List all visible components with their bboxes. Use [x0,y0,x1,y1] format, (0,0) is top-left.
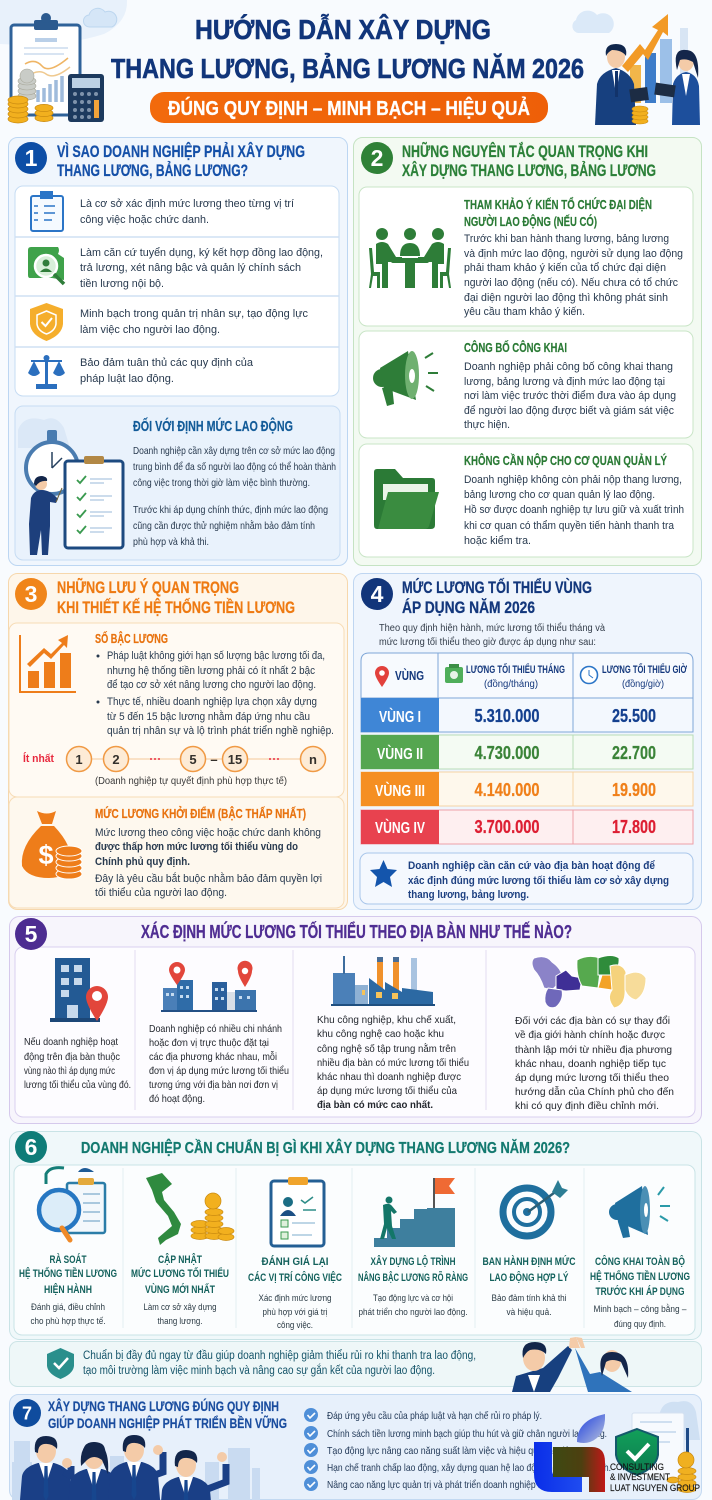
item 3 text: phù hợp với giá trị [262,1307,328,1318]
column 3 text: khu công nghệ cao hoặc khu [317,1028,444,1040]
column 3 text: áp dụng mức lương tối thiểu của [317,1085,457,1097]
item 1 text: Đánh giá, điều chỉnh [31,1302,105,1313]
icon: megaphone [373,351,438,406]
icon: money bag: $ [38,840,54,870]
benefit 3 [304,1443,582,1457]
panel: section 4 minimum wage [354,574,702,910]
consult text: Trước khi ban hành thang lương, bảng lương [464,233,669,245]
section 7 heading [48,1397,287,1431]
row: region I: VÙNG I [379,707,421,726]
logo leaf [577,1414,605,1443]
labour norm text: Trước khi áp dụng chính thức, định mức lao động [133,504,328,516]
column 4 text: Đối với các địa bàn có sự thay đổi [515,1015,670,1027]
starting salary text: Mức lương theo công việc hoặc chức danh không [95,827,321,839]
reason 2 text: tiền lương nội bộ. [80,278,164,290]
item 5 title: BAN HÀNH ĐỊNH MỨC [482,1255,576,1268]
item 4 title: NÂNG BẬC LƯƠNG RÕ RÀNG [358,1271,468,1284]
item 5 title [482,1255,576,1284]
note text: xác định đúng mức lương tối thiểu làm cơ sở xây dựng [408,875,669,887]
item 6 text: Minh bạch – công bằng – [594,1304,687,1315]
item 5 text [492,1293,566,1318]
icon: folder [374,469,439,529]
illustration: high five [512,1337,632,1392]
icon: industrial zone [331,956,435,1006]
grades bullets: Thực tế, nhiều doanh nghiệp lựa chọn xây dựng [107,696,317,708]
reason 1 text [80,198,294,226]
item 2 text: Làm cơ sở xây dựng [144,1302,216,1313]
icon: megaphone [609,1186,670,1238]
grade scale: (Doanh nghiệp tự quyết định phù hợp thực tế) [95,775,287,787]
section 4 note [360,853,693,904]
icon: rising chart [20,635,76,692]
item 1 title: RÀ SOÁT [50,1253,87,1266]
row: region I: 25.500 [612,706,656,726]
column 1 [24,958,131,1091]
column 4 text [515,1015,674,1112]
section 2 heading [402,141,656,180]
section 3 number badge: 3 [25,581,37,607]
column 1 text: lương tối thiểu của vùng đó. [24,1079,131,1091]
column 2 text: hoặc đơn vị trực thuộc đặt tại [149,1037,269,1049]
icon: cloud left [83,8,117,27]
icon: magnifier and clipboard [39,1168,105,1240]
labour norm text: Doanh nghiệp cần xây dựng trên cơ sở mức lao động [133,445,335,457]
title: THANG LƯƠNG, BẢNG LƯƠNG NĂM 2026 [111,52,584,84]
logo shield [616,1429,658,1475]
labour norm text: phù hợp và khả thi. [133,536,209,548]
column 2 text [149,1023,289,1105]
reason 3 text: Minh bạch trong quản trị nhân sự, tạo động lực [80,308,308,320]
row: region IV: 3.700.000 [474,817,540,837]
grades bullets: Pháp luật không giới hạn số lượng bậc lương tối đa, [107,650,325,662]
section 4 intro: Theo quy định hiện hành, mức lương tối thiểu tháng và [379,622,605,634]
item 2 title [131,1253,229,1296]
illustration: business people and growth chart [572,11,700,125]
section 7 heading: XÂY DỰNG THANG LƯƠNG ĐÚNG QUY ĐỊNH [48,1397,279,1414]
column 1 text: Nếu doanh nghiệp hoạt [24,1036,118,1048]
column 1 text [24,1036,131,1091]
item 2 text: thang lương. [158,1316,202,1327]
section 5 number badge [15,918,47,950]
wage table [361,653,693,844]
item 6 title [590,1255,690,1298]
icon: money bag [22,811,82,879]
logo: Luat Nguyen Group [534,1414,700,1494]
panel: section 3 notes [8,574,348,910]
wage table: (đồng/tháng) [484,678,538,690]
section 5 number badge: 5 [25,921,38,947]
consult heading: THAM KHẢO Ý KIẾN TỔ CHỨC ĐẠI DIỆN [464,197,652,212]
starting salary heading: MỨC LƯƠNG KHỞI ĐIỂM (BẬC THẤP NHẤT) [95,806,306,821]
note text: Chuẩn bị đầy đủ ngay từ đầu giúp doanh nghiệp giảm thiểu rủi ro khi thanh tra lao động, [83,1350,476,1362]
consult text: người lao động (nếu có). Nếu chưa có tổ chức [464,277,678,289]
logo coins [667,1452,696,1492]
item 4 text: Tạo động lực và cơ hội [373,1293,453,1304]
grade scale: n [309,752,317,767]
reason 2 text: trả lương, xét nâng bậc và quản lý chính sách [80,262,301,274]
section 7 number badge: 7 [22,1404,32,1424]
row: region IV: VÙNG IV [375,818,425,837]
publish text: nơi làm việc trước thời điểm đưa vào áp dụng [464,390,676,402]
section 4 number badge: 4 [371,581,384,607]
card: number of grades [9,623,344,797]
benefit 5 [304,1477,577,1491]
benefit 2 [304,1426,607,1440]
labour norm text [133,445,336,548]
column 2 text: Doanh nghiệp có nhiều chi nhánh [149,1023,282,1035]
section 6 number badge [15,1131,47,1163]
item 2 title: VÙNG MỚI NHẤT [145,1283,215,1296]
reason 1 text: Là cơ sở xác định mức lương theo từng vị trí [80,198,294,210]
labour norm text: cũng cần được thử nghiệm nhằm bảo đảm tính [133,519,315,532]
logo text: & INVESTMENT [610,1472,670,1483]
panel: preparation note [10,1337,702,1392]
benefit 4 [304,1460,611,1474]
section 2 number badge: 2 [371,145,383,171]
icon: merged map pieces [532,956,646,1008]
illustration: cheering employees [19,1435,227,1500]
icon: stairs with flag [374,1178,455,1247]
row: region IV [361,810,693,844]
reason 4 text [80,357,254,385]
grade scale: 1 [75,752,83,767]
card: publish [359,331,693,438]
column 3 text: Khu công nghiệp, khu chế xuất, [317,1014,456,1026]
publish text: lương, bảng lương và định mức lao động tại [464,376,665,388]
reason 3 text: làm việc cho người lao động. [80,324,220,336]
no submission text: khi cơ quan có thẩm quyền tiến hành thanh tra [464,520,675,532]
item 1 title: HỆ THỐNG TIỀN LƯƠNG [19,1266,117,1280]
column 4 text: hướng dẫn của Chính phủ cho đến [515,1085,674,1098]
item 3 title: ĐÁNH GIÁ LẠI [262,1255,328,1268]
item 3 text: công việc. [277,1320,313,1331]
title [111,14,584,84]
column 2 text: đơn vị áp dụng mức lương tối thiểu [149,1065,289,1077]
panel: section 1 why [8,138,348,566]
benefit 2: Chính sách tiền lương minh bạch giúp thu hút và giữ chân người lao động. [327,1428,607,1440]
section 3 heading: KHI THIẾT KẾ HỆ THỐNG TIỀN LƯƠNG [57,597,295,617]
inner columns [15,947,695,1117]
section 6 number badge: 6 [25,1134,37,1160]
icon: pin [375,666,389,687]
icon: money [445,664,463,683]
item 1 text [30,1302,106,1327]
grades bullets: quản trị nhân sự và lộ trình phát triển nghề nghiệp. [107,725,334,737]
item 3 text: Xác định mức lương [258,1293,332,1304]
item 3 evaluate [248,1177,342,1331]
item 6 text: đúng quy định. [614,1319,666,1330]
column 2 text: các địa phương khác nhau, mỗi [149,1050,277,1063]
card: starting salary [9,797,344,908]
subtitle pill [150,92,548,123]
section 3 heading [57,577,295,617]
grades bullets [96,650,334,737]
section 5 heading: XÁC ĐỊNH MỨC LƯƠNG TỐI THIỂU THEO ĐỊA BÀN NHƯ THẾ NÀO? [141,921,572,942]
reason 3 text [80,308,308,336]
wage table: LƯƠNG TỐI THIỂU THÁNG [466,662,565,676]
starting salary text: Đây là yêu cầu bắt buộc nhằm bảo đảm quyền lợi [95,872,322,885]
column 4 text: áp dụng mức lương tối thiểu theo [515,1072,669,1084]
column 3 [317,956,469,1111]
column 1 text: động trên địa bàn thuộc [24,1051,120,1063]
item 2 update [131,1173,234,1327]
icon: target [503,1180,568,1236]
column 3 text: công nghệ số tập trung nằm trên [317,1042,456,1055]
note text [83,1350,476,1377]
icon: shield [30,303,63,341]
section 1 number badge [15,142,47,174]
column 4 text: về địa giới hành chính hoặc được [515,1029,665,1041]
column 3 text [317,1014,469,1111]
item 6 publicise [590,1186,690,1330]
card: labour norm [15,406,340,560]
icon: meeting [369,228,451,288]
icon: star [370,860,397,887]
row: region I [361,698,693,732]
starting salary text: Chính phủ quy định. [95,856,190,868]
row: region III: 4.140.000 [474,780,540,800]
grades heading: SỐ BẬC LƯƠNG [95,631,168,646]
starting salary text: tối thiểu của người lao động. [95,887,227,899]
grades bullets: để tạo cơ sở xét nâng lương cho người lao động. [107,679,316,691]
card: consult [359,187,693,326]
subtitle pill: ĐÚNG QUY ĐỊNH – MINH BẠCH – HIỆU QUẢ [168,96,530,120]
section 1 heading [57,142,305,180]
item 1 title [19,1253,117,1296]
item 4 text: phát triển cho người lao động. [358,1307,468,1318]
section 3 number badge [15,578,47,610]
icon: branches with pins [161,961,257,1012]
panel: section 5 region determination [10,916,702,1124]
item 5 title: LAO ĐỘNG HỢP LÝ [490,1271,569,1284]
reason 4 text: pháp luật lao động. [80,373,174,385]
item 6 title: CÔNG KHAI TOÀN BỘ [595,1255,685,1268]
section 4 heading [402,577,592,617]
item 4 title: XÂY DỰNG LỘ TRÌNH [370,1255,456,1268]
grade scale: – [210,752,218,767]
grade scale: Ít nhất [23,752,54,765]
grade scale: 2 [112,752,120,767]
reason 2 text [80,247,323,290]
section 4 number badge [361,578,393,610]
item 6 title: TRƯỚC KHI ÁP DỤNG [596,1285,684,1298]
item 2 title: MỨC LƯƠNG TỐI THIỂU [131,1266,229,1280]
section 7 heading: GIÚP DOANH NGHIỆP PHÁT TRIỂN BỀN VỮNG [48,1414,287,1431]
note text: tạo môi trường làm việc minh bạch và nâng cao sự gắn kết của người lao động. [83,1364,435,1377]
icon: office building with pin [50,958,108,1022]
consult heading: NGƯỜI LAO ĐỘNG (NẾU CÓ) [464,214,597,229]
column 1 text: vùng nào thì áp dụng mức [24,1065,115,1077]
publish text: để người lao động được biết và giám sát việc [464,405,674,417]
panel: section 6 preparation [10,1131,702,1340]
item 2 text [144,1302,216,1327]
section 3 heading: NHỮNG LƯU Ý QUAN TRỌNG [57,577,239,597]
starting salary text: được thấp hơn mức lương tối thiểu vùng do [95,841,298,853]
row: region II: VÙNG II [377,744,423,763]
publish text [464,361,676,431]
wage table: VÙNG [395,668,424,683]
section 6 heading: DOANH NGHIỆP CẦN CHUẨN BỊ GÌ KHI XÂY DỰNG THANG LƯƠNG NĂM 2026? [81,1138,570,1157]
publish text: thực hiện. [464,419,510,431]
icon: clock [580,666,598,684]
grade scale: 15 [228,752,242,767]
item 4 title [358,1255,468,1284]
title: HƯỚNG DẪN XÂY DỰNG [195,14,491,45]
column 3 text: khác nhau thì doanh nghiệp được [317,1071,461,1083]
section 4 intro: mức lương tối thiểu theo giờ được áp dụng như sau: [379,636,596,648]
benefit checklist [304,1408,611,1491]
item 1 title: HIỆN HÀNH [44,1283,92,1296]
row: region III: 19.900 [612,780,656,800]
column 2 text: tương ứng với địa bàn nơi đơn vị [149,1079,278,1091]
row: region I: 5.310.000 [474,706,540,726]
labour norm text: trung bình để đa số người lao động có thể hoàn thành [133,461,336,473]
benefit 5: Nâng cao năng lực quản trị và phát triển doanh nghiệp bền vững. [327,1479,577,1491]
consult heading [464,197,652,229]
no submission text: Doanh nghiệp không còn phải nộp thang lương, [464,474,682,486]
row: region III: VÙNG III [375,781,425,800]
logo letter L [534,1442,582,1492]
reasons list [15,186,339,396]
starting salary text [95,827,322,899]
note text: thang lương, bảng lương. [408,889,529,901]
item 2 title: CẬP NHẬT [158,1253,202,1266]
item 5 text: và hiệu quả. [506,1307,552,1318]
column 4 text: khác nhau, doanh nghiệp tiếp tục [515,1058,666,1070]
column 4 text: khi có quy định điều chỉnh mới. [515,1100,659,1112]
wage table: (đồng/giờ) [622,678,664,690]
column 3 text: nhiều địa bàn có mức lương tối thiểu [317,1057,469,1069]
column 3 text: địa bàn có mức cao nhất. [317,1099,433,1111]
labour norm text: công việc trong thời giờ làm việc bình thường. [133,477,310,489]
note text [408,860,669,901]
icon: recruitment search [28,247,64,284]
grade scale [23,746,326,787]
item 1 text: cho phù hợp thực tế. [30,1316,106,1327]
labour norm heading: ĐỐI VỚI ĐỊNH MỨC LAO ĐỘNG [133,417,293,435]
consult text: yêu cầu tham khảo ý kiến. [464,306,585,318]
section 1 heading: THANG LƯƠNG, BẢNG LƯƠNG? [57,161,248,180]
benefit 1 [304,1408,542,1422]
illustration: city skyline [12,1441,260,1500]
consult text: đại diện người lao động thì không phát sinh [464,292,668,304]
benefit 4: Hạn chế tranh chấp lao động, xây dựng quan hệ lao động hài hòa, ổn định. [327,1462,611,1474]
section 7 number badge [13,1399,41,1427]
row: region IV: 17.800 [612,817,656,837]
row: region II: 4.730.000 [474,743,540,763]
section 4 intro [379,622,605,648]
no submission text: Hồ sơ được doanh nghiệp tự lưu giữ và xuất trình [464,504,684,516]
reason 2 text: Làm căn cứ tuyển dụng, ký kết hợp đồng lao động, [80,247,323,259]
logo text: CONSULTING [610,1462,664,1473]
grades bullets: từ 5 đến 15 bậc lương nhằm đáp ứng nhu cầu [107,710,310,723]
icon: teal shield [47,1348,74,1379]
benefit 1: Đáp ứng yêu cầu của pháp luật và hạn chế rủi ro pháp lý. [327,1410,542,1422]
section 4 heading: MỨC LƯƠNG TỐI THIỂU VÙNG [402,577,592,597]
illustration: stopwatch, checklist and man [18,418,123,555]
row: region II: 22.700 [612,743,656,763]
reason 4 text: Bảo đảm tuân thủ các quy định của [80,357,254,369]
column 4 text: thành lập mới từ nhiều địa phương [515,1044,672,1056]
note text: Doanh nghiệp cần căn cứ vào địa bàn hoạt động để [408,860,655,872]
publish text: Doanh nghiệp phải công bố công khai thang [464,361,673,373]
no submission text: hoặc kiểm tra. [464,535,531,547]
header [0,0,700,125]
icon: scales [28,355,65,389]
illustration: document and cloud [632,1401,700,1479]
logo text [610,1462,700,1494]
reason 1 text: công việc hoặc chức danh. [80,214,209,226]
consult text [464,233,683,318]
item 4 text [358,1293,468,1318]
column 2 [149,961,289,1105]
no submission text [464,474,684,547]
panel: section 2 principles [354,138,702,566]
logo text: LUAT NGUYEN GROUP [610,1483,700,1494]
item 5 text: Bảo đảm tính khả thi [492,1293,566,1304]
benefit 3: Tạo động lực nâng cao năng suất làm việc và hiệu quả lao động. [327,1445,582,1457]
grade scale: 5 [189,752,197,767]
section 1 number badge: 1 [25,145,38,171]
logo letter n [553,1447,605,1492]
publish heading: CÔNG BỐ CÔNG KHAI [464,340,567,355]
column 2 text: đó hoạt động. [149,1093,205,1105]
item 1 review [19,1168,117,1327]
section 1 heading: VÌ SAO DOANH NGHIỆP PHẢI XÂY DỰNG [57,142,305,161]
section 4 heading: ÁP DỤNG NĂM 2026 [402,598,535,617]
column 4 [515,956,674,1112]
item 6 text [594,1304,687,1330]
icon: map of Vietnam and coins [146,1173,234,1245]
item 3 title: CÁC VỊ TRÍ CÔNG VIỆC [248,1271,342,1284]
item 5 norms [482,1180,576,1318]
card: no submission [359,444,693,557]
consult text: phải tham khảo ý kiến của tổ chức đại diện [464,262,666,274]
panel: section 7 sustainable [10,1394,702,1500]
no submission text: bảng lương cho cơ quan quản lý lao động. [464,489,655,501]
item 4 roadmap [358,1178,468,1318]
grades bullets: nhưng hệ thống tiền lương phải có ít nhất 2 bậc [107,665,315,677]
inner columns [14,1165,695,1335]
icon: evaluation clipboard [271,1177,324,1246]
section 2 number badge [361,142,393,174]
icon: checklist [31,192,63,231]
item 3 text [258,1293,332,1331]
icon: clipboard and coins [8,13,104,123]
consult text: và định mức lao động, người sử dụng lao động [464,248,683,260]
row: region III [361,772,693,806]
item 3 title [248,1255,342,1284]
row: region II [361,735,693,769]
